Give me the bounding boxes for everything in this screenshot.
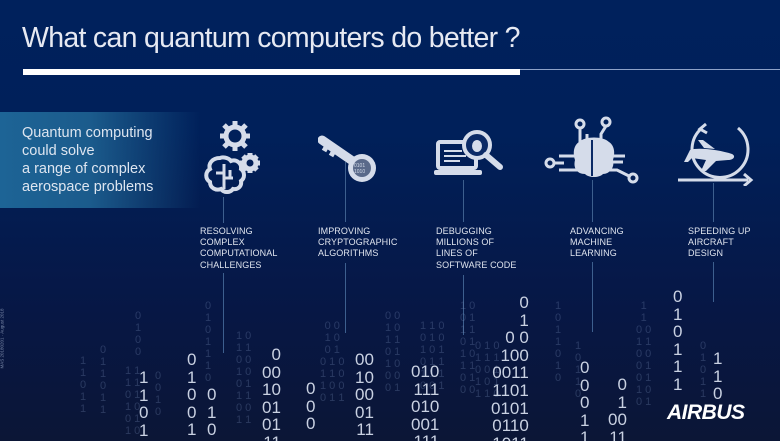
binary digits background: 0 1 [636, 396, 651, 408]
binary digits background: 1 1 1 [420, 368, 444, 380]
binary digits background: 0 1 [125, 413, 140, 425]
binary digits background: 0 [580, 393, 589, 412]
binary digits background: 1 1 [236, 342, 251, 354]
label: machine learning: ADVANCING [570, 226, 624, 236]
binary digits background: 0 [187, 403, 196, 422]
binary digits background: 1 [641, 312, 647, 324]
binary digits background: 1 [80, 391, 86, 403]
binary digits background: 1 [555, 300, 561, 312]
intro callout panel: could solve [22, 143, 95, 159]
intro callout panel: a range of complex [22, 161, 145, 177]
binary digits background: 1 [205, 336, 211, 348]
connector lines [223, 197, 224, 223]
icon: key: 1010 [354, 169, 365, 175]
binary digits background: 1 [139, 368, 148, 387]
binary digits background: 0 1 [636, 372, 651, 384]
binary digits background: 1 [155, 394, 161, 406]
label: cryptographic: CRYPTOGRAPHIC [318, 237, 397, 247]
binary digits background: 1 [700, 388, 706, 400]
binary digits background: 0 0 [460, 384, 475, 396]
binary digits background: 01 [262, 398, 281, 417]
binary digits background: 1 1 [385, 334, 400, 346]
binary digits background: 0 0 [325, 320, 340, 332]
label: cryptographic: IMPROVING [318, 226, 370, 236]
binary digits background: 1 [187, 420, 196, 439]
logo: AIRBUS: AIRBUS [667, 401, 745, 424]
label: debugging [436, 226, 516, 270]
binary digits background: 1 [139, 421, 148, 440]
binary digits background: 1 [139, 386, 148, 405]
binary digits background: 1 [555, 360, 561, 372]
binary digits background: 0 [205, 372, 211, 384]
binary digits background: 1 [713, 367, 722, 386]
binary digits background: 1 0 [385, 322, 400, 334]
binary digits background: 0 [306, 397, 315, 416]
binary digits background: 0 [519, 293, 529, 312]
intro callout panel: aerospace problems [22, 179, 153, 195]
icon: brain with gears [204, 121, 260, 194]
binary digits background: 1 1 [125, 377, 140, 389]
binary digits background: 0 [187, 385, 196, 404]
binary digits background: 1 [713, 349, 722, 368]
intro callout panel: Quantum computing [22, 125, 153, 141]
icon: laptop with magnifier [434, 130, 503, 175]
binary digits background: 0 0 [505, 328, 529, 347]
binary digits background: 1 [100, 356, 106, 368]
binary digits background: 0 [555, 372, 561, 384]
binary digits background: 1 [673, 375, 682, 394]
binary digits background: 1 [205, 312, 211, 324]
binary digits background: 1 0 [460, 300, 475, 312]
binary digits background: 0 [700, 340, 706, 352]
binary digits background: 0 [575, 352, 581, 364]
binary digits background: 1 1 0 [475, 388, 499, 400]
binary digits background: 111 [414, 380, 439, 399]
binary digits background: 0 [155, 382, 161, 394]
binary digits background: 00 [262, 363, 281, 382]
binary digits background: 0 [575, 388, 581, 400]
binary digits background: 1101 [492, 381, 529, 400]
binary digits background: 01 [355, 403, 374, 422]
binary digits background: 0 [207, 385, 216, 404]
binary digits background: 1 [80, 367, 86, 379]
binary digits background: 1 [80, 355, 86, 367]
label: resolving: COMPUTATIONAL [200, 248, 277, 258]
binary digits background: 0110 [492, 416, 529, 435]
binary digits background: 1 0 [460, 348, 475, 360]
binary digits background: 1 1 [636, 336, 651, 348]
binary digits background: 00 [355, 385, 374, 404]
binary digits background: 1 [100, 404, 106, 416]
binary digits background: 1 0 1 [475, 376, 499, 388]
binary digits background: 0 1 0 [420, 332, 444, 344]
binary digits background: 1 0 [385, 358, 400, 370]
binary digits background: 0 [555, 348, 561, 360]
label: debugging: LINES OF [436, 248, 478, 258]
binary digits background: 1 0 [325, 332, 340, 344]
binary digits background: 0 [673, 287, 682, 306]
binary digits background: 1 [575, 340, 581, 352]
binary digits background: 1 [641, 300, 647, 312]
binary digits background: 0 0 [385, 310, 400, 322]
binary digits background: 1 [580, 411, 589, 430]
binary digits background: 00 [608, 410, 627, 429]
binary digits background: 010 [411, 397, 439, 416]
binary digits background: 1 [673, 340, 682, 359]
binary digits background: 1 0 [236, 366, 251, 378]
binary digits background: 1 [80, 403, 86, 415]
binary digits background: 0 [205, 300, 211, 312]
binary digits background: 0 [135, 310, 141, 322]
binary digits background: 0 0 [636, 348, 651, 360]
icon: AI brain with circuits [544, 116, 638, 184]
binary digits background: 0 1 [460, 312, 475, 324]
binary digits background: 0 [155, 406, 161, 418]
binary digits background: 0 [580, 376, 589, 395]
binary digits background: 1 [673, 305, 682, 324]
binary digits background: 0 [100, 344, 106, 356]
label: debugging: DEBUGGING [436, 226, 492, 236]
binary digits background: 0011 [492, 363, 529, 382]
binary digits background: 0 1 1 [320, 392, 344, 404]
binary digits background: 0 1 [385, 346, 400, 358]
binary digits background: 10 [355, 368, 374, 387]
binary digits background: 0 [187, 350, 196, 369]
title underline [23, 69, 520, 75]
binary digits background: 0 [80, 379, 86, 391]
binary digits background: 0 [617, 375, 627, 394]
binary digits background: 1 [700, 352, 706, 364]
title: What can quantum computers do better ? [22, 22, 520, 54]
binary digits background: 1 [205, 348, 211, 360]
binary digits background: 0 0 [636, 324, 651, 336]
binary digits background: 0 0 1 [420, 380, 444, 392]
binary digits background: 0 [555, 312, 561, 324]
label: resolving: COMPLEX [200, 237, 245, 247]
label: machine learning: LEARNING [570, 248, 617, 258]
binary digits background: 0 1 [460, 336, 475, 348]
binary digits background: 0 [306, 379, 315, 398]
binary digits background: 1 0 [636, 384, 651, 396]
binary digits background: 1 0 [125, 401, 140, 413]
binary digits background: 1 [207, 403, 216, 422]
binary digits background: 0 [713, 384, 722, 403]
label: resolving: RESOLVING [200, 226, 253, 236]
label: machine learning: MACHINE [570, 237, 612, 247]
binary digits background: 1 [187, 368, 196, 387]
binary digits background: 0 1 [325, 344, 340, 356]
binary digits background: 1 1 [125, 365, 140, 377]
binary digits background: 1 1 0 [420, 320, 444, 332]
binary digits background: 0 [207, 420, 216, 439]
binary digits background: 0 [135, 334, 141, 346]
binary digits background: 0 [100, 380, 106, 392]
binary digits background: 1 1 0 [320, 368, 344, 380]
label: cryptographic: ALGORITHMS [318, 248, 379, 258]
binary digits background: 1 1 [460, 324, 475, 336]
icon: key [318, 136, 376, 182]
binary digits background: 0 1 [636, 360, 651, 372]
label: cryptographic [318, 226, 397, 258]
binary digits background: 100 [500, 346, 529, 365]
binary digits background: 0 [155, 370, 161, 382]
label: aircraft design: AIRCRAFT [688, 237, 734, 247]
icon: key: 0101 [354, 163, 365, 169]
binary digits background: 0 [135, 346, 141, 358]
label: resolving [200, 226, 278, 270]
binary digits background: 00 [355, 350, 374, 369]
binary digits background: 1 [555, 324, 561, 336]
binary digits background: 0 0 [236, 354, 251, 366]
binary digits background: 0 [580, 358, 589, 377]
binary digits background: 1 0 1 [420, 344, 444, 356]
label: aircraft design: SPEEDING UP [688, 226, 751, 236]
binary digits background: 1 [673, 357, 682, 376]
binary digits background: 0 [673, 322, 682, 341]
binary digits background: 1 [617, 393, 627, 412]
binary digits background: 0 1 0 [475, 340, 499, 352]
binary digits background: 10 [262, 380, 281, 399]
binary digits background: 0 1 [125, 389, 140, 401]
binary digits background: 0 1 [385, 382, 400, 394]
binary digits background: 0 [139, 403, 148, 422]
intro callout panel [0, 112, 200, 208]
binary digits background: 1 [555, 336, 561, 348]
binary digits background: 0 1 0 [320, 356, 344, 368]
binary digits background: 1 0 [125, 425, 140, 437]
binary digits background: 0101 [491, 399, 529, 418]
binary digits background: 1 1 1 [475, 352, 499, 364]
binary digits background: 1 [575, 376, 581, 388]
binary digits background: 1 1 [236, 390, 251, 402]
binary digits background: 1 0 0 [320, 380, 344, 392]
binary digits background: 0 [205, 324, 211, 336]
label: debugging: SOFTWARE CODE [436, 260, 516, 270]
binary digits background: 1 [519, 311, 529, 330]
binary digits background: 0 1 [460, 372, 475, 384]
binary digits background: 1 [100, 368, 106, 380]
icon: aircraft in cycle arrow [678, 122, 754, 186]
binary digits background: 0 1 [236, 378, 251, 390]
binary digits background: 0 [700, 364, 706, 376]
binary digits background: 1 [100, 392, 106, 404]
label: aircraft design [688, 226, 751, 258]
binary digits background: 0 0 1 [475, 364, 499, 376]
binary digits background: 1 1 [236, 414, 251, 426]
binary digits background: 1 [205, 360, 211, 372]
binary digits background: 010 [411, 362, 439, 381]
binary digits background: 0 1 1 [420, 356, 444, 368]
binary digits background: 11 [356, 420, 374, 439]
binary digits background: 001 [411, 415, 439, 434]
label: machine learning [570, 226, 624, 258]
binary digits background: 1 1 [460, 360, 475, 372]
label: aircraft design: DESIGN [688, 248, 723, 258]
label: debugging: MILLIONS OF [436, 237, 494, 247]
binary digits background: 1 [700, 376, 706, 388]
binary digits background: 1 0 [236, 330, 251, 342]
binary digits background: 0 [271, 345, 281, 364]
binary digits background: 1 [135, 322, 141, 334]
binary digits background: 0 0 [236, 402, 251, 414]
binary digits background: 01 [262, 415, 281, 434]
binary digits background: 0 0 [385, 370, 400, 382]
binary digits background [80, 287, 722, 441]
label: resolving: CHALLENGES [200, 260, 262, 270]
binary digits background: 1 [575, 364, 581, 376]
binary digits background: 0 [306, 414, 315, 433]
